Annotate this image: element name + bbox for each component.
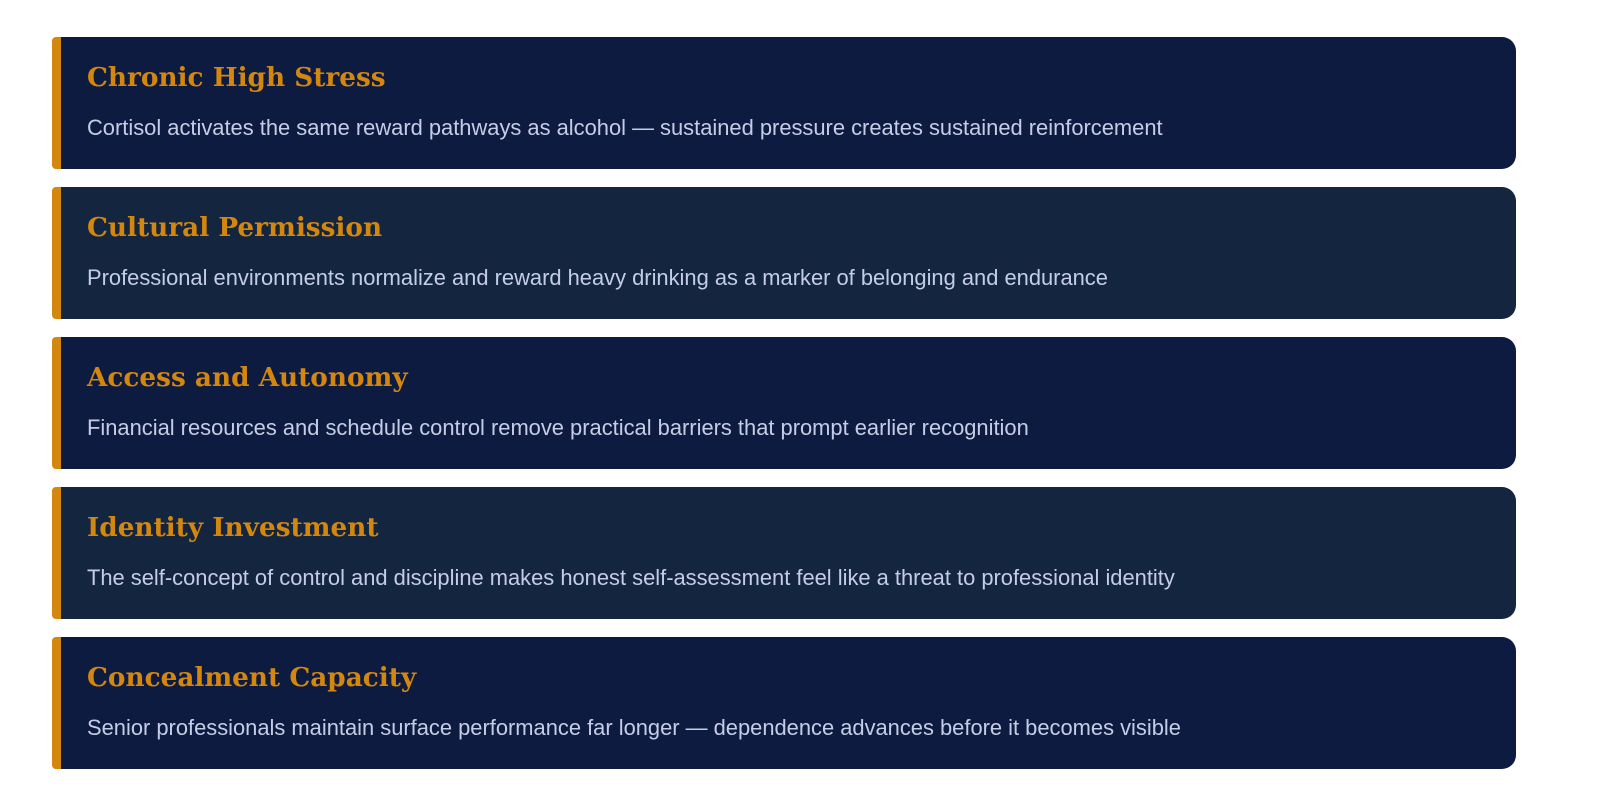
- heading: Identity Investment: [87, 512, 378, 543]
- heading: Cultural Permission: [87, 212, 382, 243]
- card: access and autonomy: [52, 337, 1516, 469]
- card: cultural permission: [52, 187, 1516, 319]
- text block: Senior professionals maintain surface performance far longer — dependence advances before it becomes visible: [87, 715, 1181, 740]
- text block: Cortisol activates the same reward pathways as alcohol — sustained pressure creates sustained reinforcement: [87, 115, 1163, 140]
- text block: The self-concept of control and discipline makes honest self-assessment feel like a threat to professional identity: [87, 565, 1175, 590]
- card: identity investment: [52, 487, 1516, 619]
- heading: Chronic High Stress: [87, 62, 386, 93]
- card: chronic high stress: [52, 37, 1516, 169]
- card: concealment capacity: [52, 637, 1516, 769]
- heading: Access and Autonomy: [87, 362, 408, 393]
- text block: Professional environments normalize and reward heavy drinking as a marker of belonging and endurance: [87, 265, 1108, 290]
- heading: Concealment Capacity: [87, 662, 416, 693]
- text block: Financial resources and schedule control remove practical barriers that prompt earlier recognition: [87, 415, 1029, 440]
